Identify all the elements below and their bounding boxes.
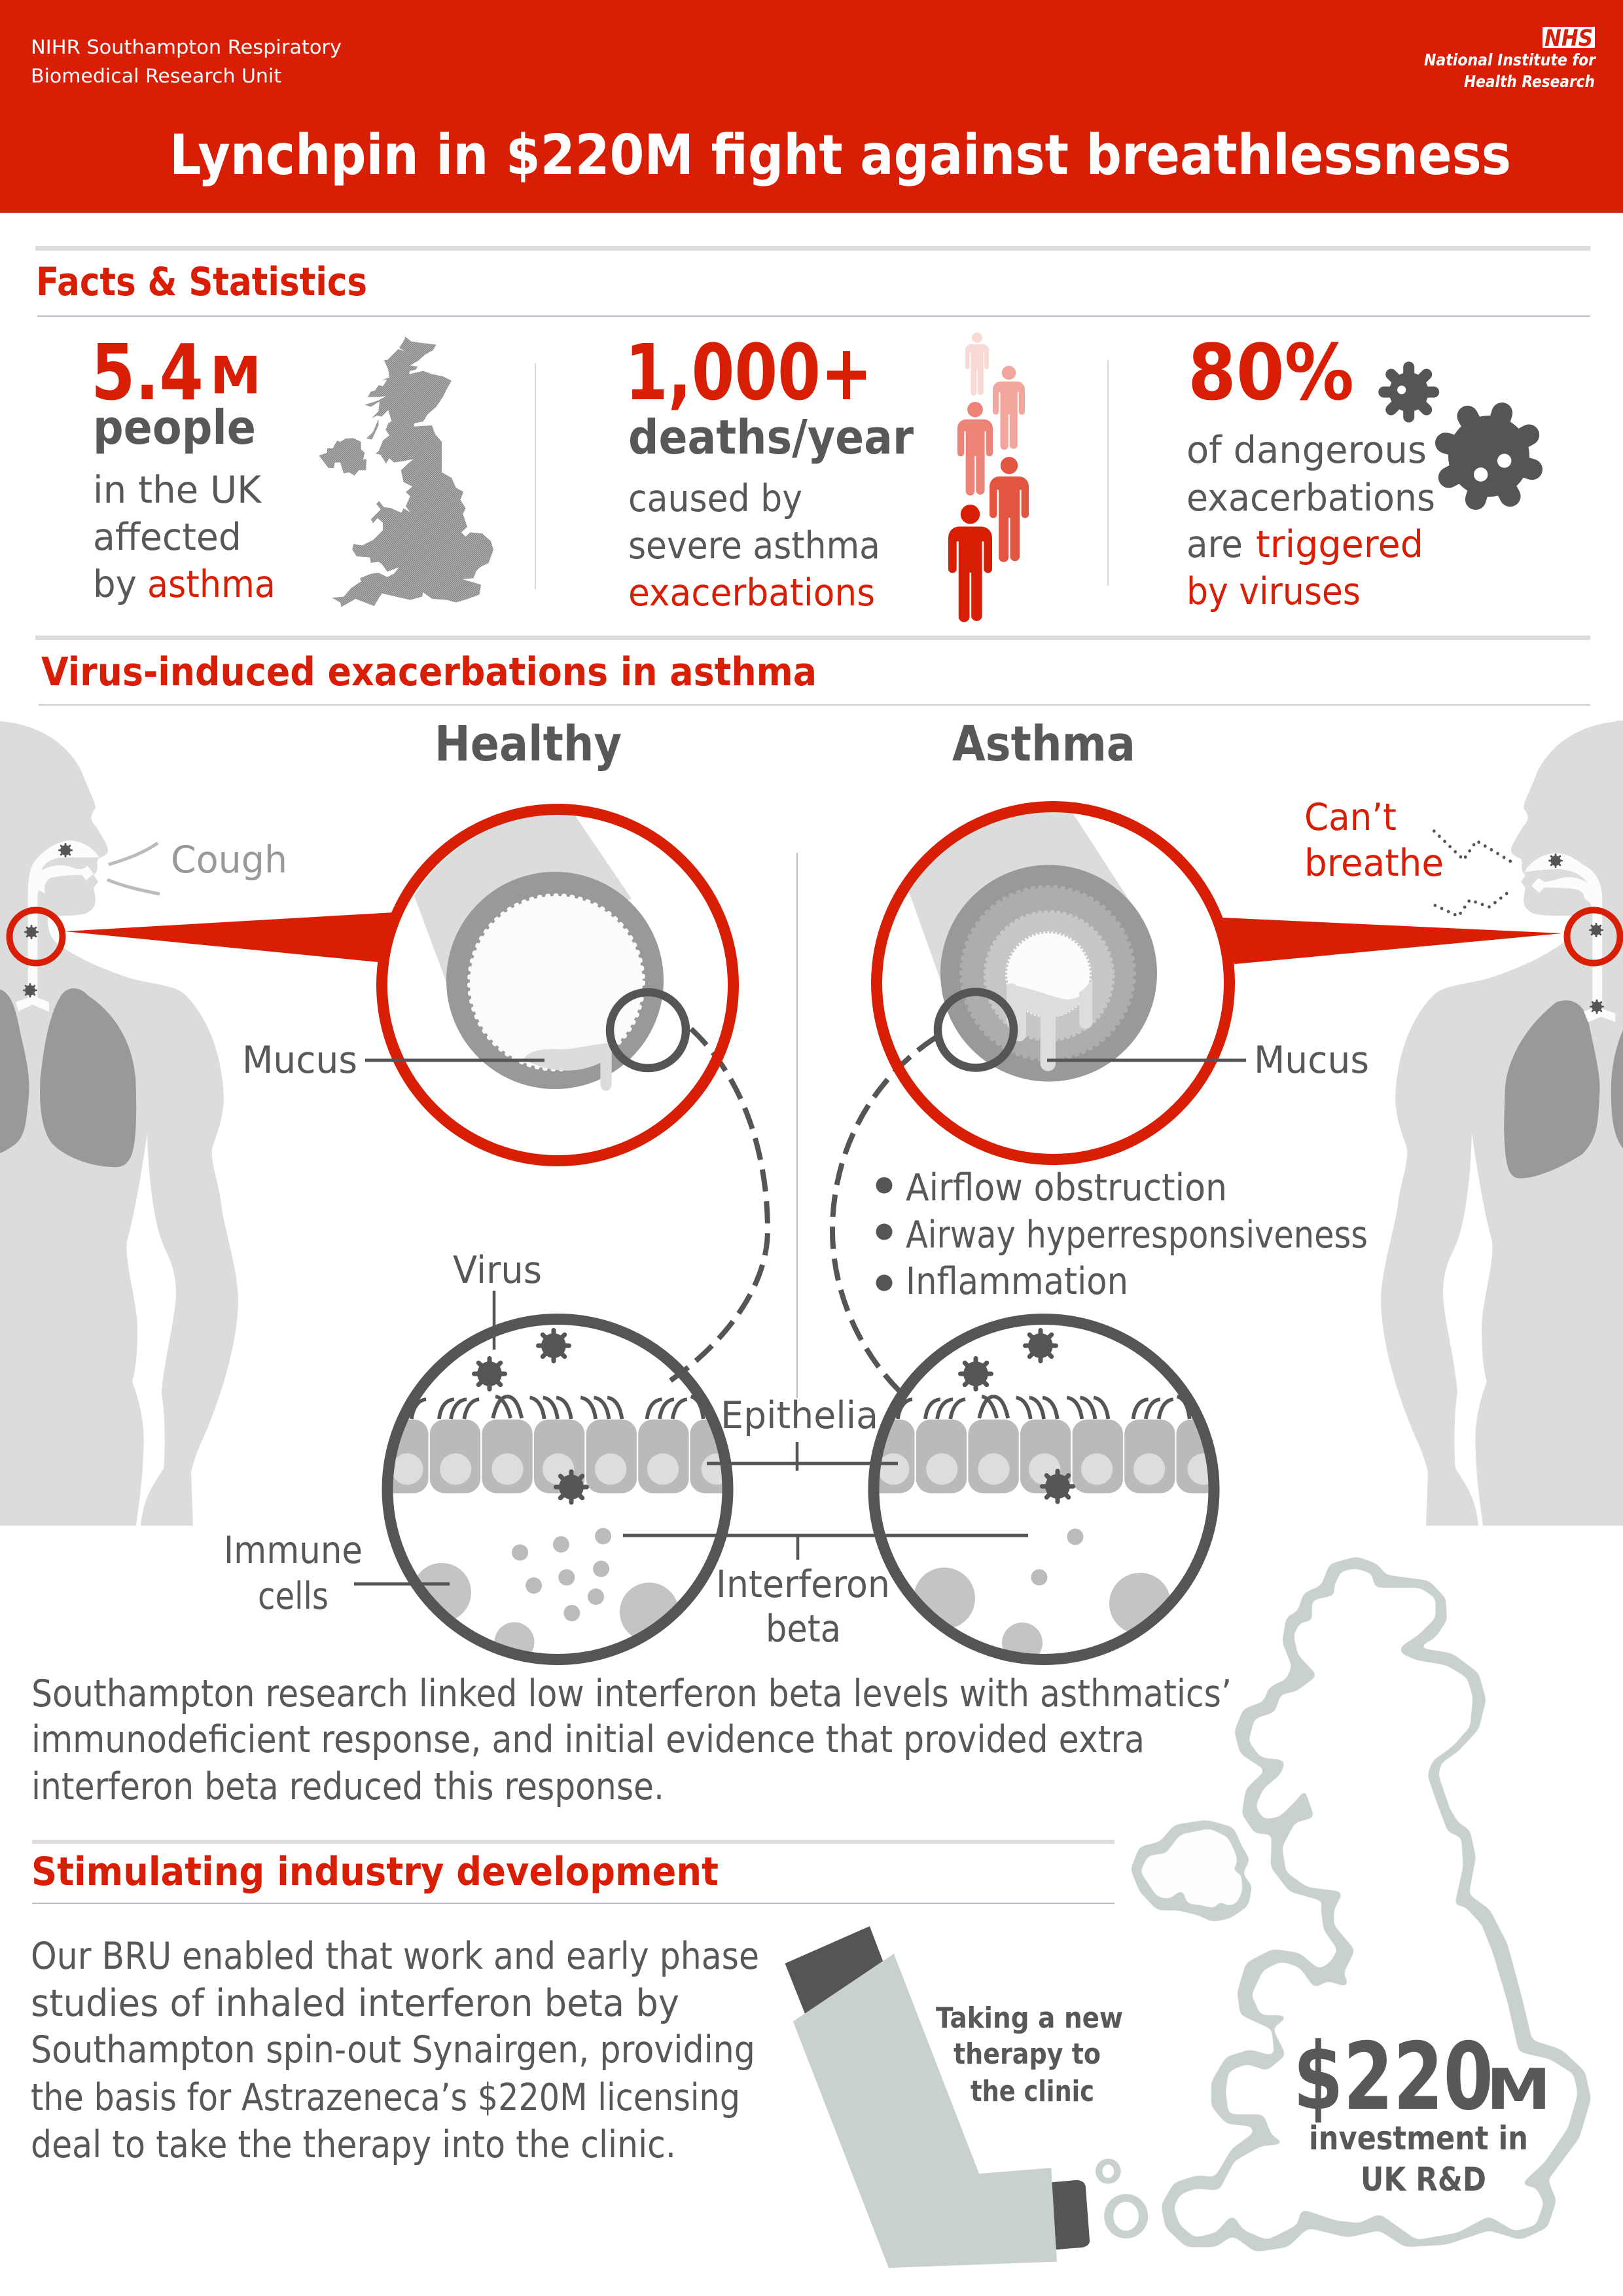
stat: 220M investment: investment in (1309, 2119, 1528, 2157)
unit name: Biomedical Research Unit (31, 65, 281, 87)
NHS logo (1424, 26, 1596, 91)
NHS logo: NHS (1544, 26, 1593, 52)
stat: 5.4M people (91, 327, 276, 606)
label: mucus left: Mucus (242, 1039, 357, 1082)
immune cells (418, 1563, 677, 1652)
label: can't breathe with dotted lines (1304, 796, 1514, 916)
stat: 5.4M people: M (210, 347, 261, 406)
icon: UK map (319, 336, 493, 607)
airway lumen (469, 895, 643, 1069)
pointer: left red wedge (65, 912, 394, 962)
label: virus: Virus (453, 1249, 542, 1292)
lungs (1504, 1000, 1623, 1178)
stat: 220M investment: $220 (1293, 2023, 1493, 2131)
stat: 80 percent: by viruses (1186, 570, 1361, 613)
text block: BRU and Synairgen: deal to take the therapy into the clinic. (31, 2123, 676, 2166)
mucus (1007, 980, 1092, 1071)
viruses (474, 1331, 586, 1502)
NHS logo: National Institute for (1424, 50, 1596, 69)
stat: 80 percent: are (1186, 523, 1243, 566)
label: taking a new therapy: the clinic (971, 2075, 1094, 2108)
icon: UK shaped cloud (1132, 1558, 1590, 2251)
text block: BRU and Synairgen: the basis for Astrazeneca’s $220M licensing (31, 2076, 740, 2119)
icon: large virus (1433, 400, 1545, 512)
stat: 5.4M people: asthma (147, 563, 276, 606)
figure: asthma body (1381, 721, 1623, 1526)
stat: 1000+ deaths per year: deaths/year (628, 410, 914, 465)
stat: 80 percent: triggered (1256, 523, 1423, 566)
stat: 80 percent (1186, 327, 1435, 613)
right throat marker (1567, 910, 1620, 963)
section: stimulating industry development (31, 1840, 1115, 2166)
stat: 5.4M people: people (93, 400, 256, 455)
mucus (524, 1043, 612, 1091)
list: asthma symptoms: Inflammation (906, 1260, 1128, 1303)
small viruses in airways (24, 844, 1603, 1013)
dashed connector: healthy (665, 1029, 768, 1384)
stat: 5.4M people: in the UK (93, 469, 262, 512)
label: can't breathe with dotted lines: breathe (1304, 842, 1444, 885)
list: asthma symptoms: Airway hyperresponsiveness (906, 1213, 1368, 1257)
text block: BRU and Synairgen: Southampton spin-out Synairgen, providing (31, 2028, 755, 2072)
label: taking a new therapy: therapy to (954, 2037, 1101, 2071)
label: immune cells (224, 1529, 450, 1618)
thickened wall inner (985, 912, 1113, 1040)
panel: asthma epithelium circle (864, 1319, 1227, 1663)
text block: BRU and Synairgen: Our BRU enabled that work and early phase (31, 1935, 759, 1978)
label: interferon beta: beta (766, 1607, 841, 1651)
panel: healthy airway magnifier (382, 809, 733, 1161)
text block: research finding: interferon beta reduced this response. (31, 1765, 664, 1808)
label: mucus right: Mucus (1254, 1039, 1369, 1082)
icon: inhaler (785, 1926, 1143, 2268)
label: interferon beta: Interferon (716, 1563, 890, 1606)
airway (16, 840, 99, 1012)
stat: 220M investment: UK R&D (1361, 2161, 1486, 2198)
interferon beta particles (1031, 1529, 1084, 1585)
stat: 1000+ deaths per year: exacerbations (628, 571, 875, 615)
icon: small virus (1384, 367, 1434, 417)
label: cough with lines: Cough (171, 838, 287, 882)
interferon beta particles (512, 1528, 611, 1621)
stat: 1000+ deaths per year: caused by (628, 477, 802, 520)
stat: 5.4M people: by (93, 563, 137, 606)
section: facts and statistics (35, 246, 1590, 622)
stat: 80 percent: of dangerous (1186, 429, 1427, 472)
heading: stimulating industry development: Stimulating industry development (31, 1849, 719, 1895)
text block: BRU and Synairgen (31, 1935, 759, 2166)
pointer: right red wedge (1222, 918, 1562, 964)
stat: 1000+ deaths per year (625, 327, 914, 615)
list: asthma symptoms: Airflow obstruction (906, 1166, 1227, 1210)
label: cough with lines (107, 838, 287, 894)
text block: research finding: immunodeficient response, and initial evidence that provided extra (31, 1718, 1145, 1761)
panel: asthma airway magnifier (877, 806, 1229, 1160)
label: taking a new therapy (936, 2001, 1123, 2108)
unit name (31, 36, 342, 87)
small cloud (1132, 1821, 1251, 1921)
immune cells (914, 1568, 1170, 1654)
heading: virus-induced exacerbations: Virus-induced exacerbations in asthma (41, 649, 817, 695)
section: virus-induced exacerbations (0, 636, 1623, 1808)
narrowed lumen (1007, 933, 1090, 1016)
text block: BRU and Synairgen: studies of inhaled interferon beta by (31, 1982, 679, 2025)
stat: 1000+ deaths per year: 1,000+ (625, 327, 872, 418)
stat: 220M investment: M (1486, 2057, 1551, 2123)
label: can't breathe with dotted lines: Can’t (1304, 796, 1397, 839)
heading: facts and statistics: Facts & Statistics (36, 259, 367, 305)
icon: fading people (948, 332, 1029, 622)
stat: 5.4M people: 5.4 (91, 327, 204, 418)
NHS logo: Health Research (1464, 72, 1595, 91)
epithelial cells (378, 1397, 741, 1494)
unit name: NIHR Southampton Respiratory (31, 36, 342, 58)
stat: 220M investment (1293, 2023, 1551, 2198)
panel: healthy epithelium circle (378, 1319, 741, 1662)
viruses (961, 1331, 1073, 1501)
label: epithelia: Epithelia (721, 1394, 878, 1437)
label: taking a new therapy: Taking a new (936, 2001, 1123, 2035)
column heading: asthma: Asthma (952, 716, 1135, 772)
list: asthma symptoms (876, 1166, 1368, 1303)
text block: research finding (31, 1672, 1232, 1808)
dashed connector: asthma (832, 1037, 936, 1391)
label: interferon beta (623, 1535, 1028, 1651)
airway (1525, 853, 1615, 1022)
stat: 80 percent: 80% (1188, 327, 1354, 418)
left throat marker (9, 910, 63, 963)
figure: healthy body (0, 721, 238, 1526)
stat: 1000+ deaths per year: severe asthma (628, 524, 880, 567)
thickened wall outer (961, 887, 1134, 1060)
label: immune cells: cells (258, 1575, 329, 1618)
epithelial cells (864, 1397, 1227, 1494)
label: immune cells: Immune (224, 1529, 363, 1572)
column heading: healthy: Healthy (435, 716, 622, 772)
header banner (0, 0, 1623, 213)
stat: 80 percent: exacerbations (1186, 476, 1435, 520)
lungs (0, 988, 136, 1167)
stat: 5.4M people: affected (93, 516, 241, 559)
text block: research finding: Southampton research linked low interferon beta levels with asthmatics’ (31, 1672, 1232, 1715)
